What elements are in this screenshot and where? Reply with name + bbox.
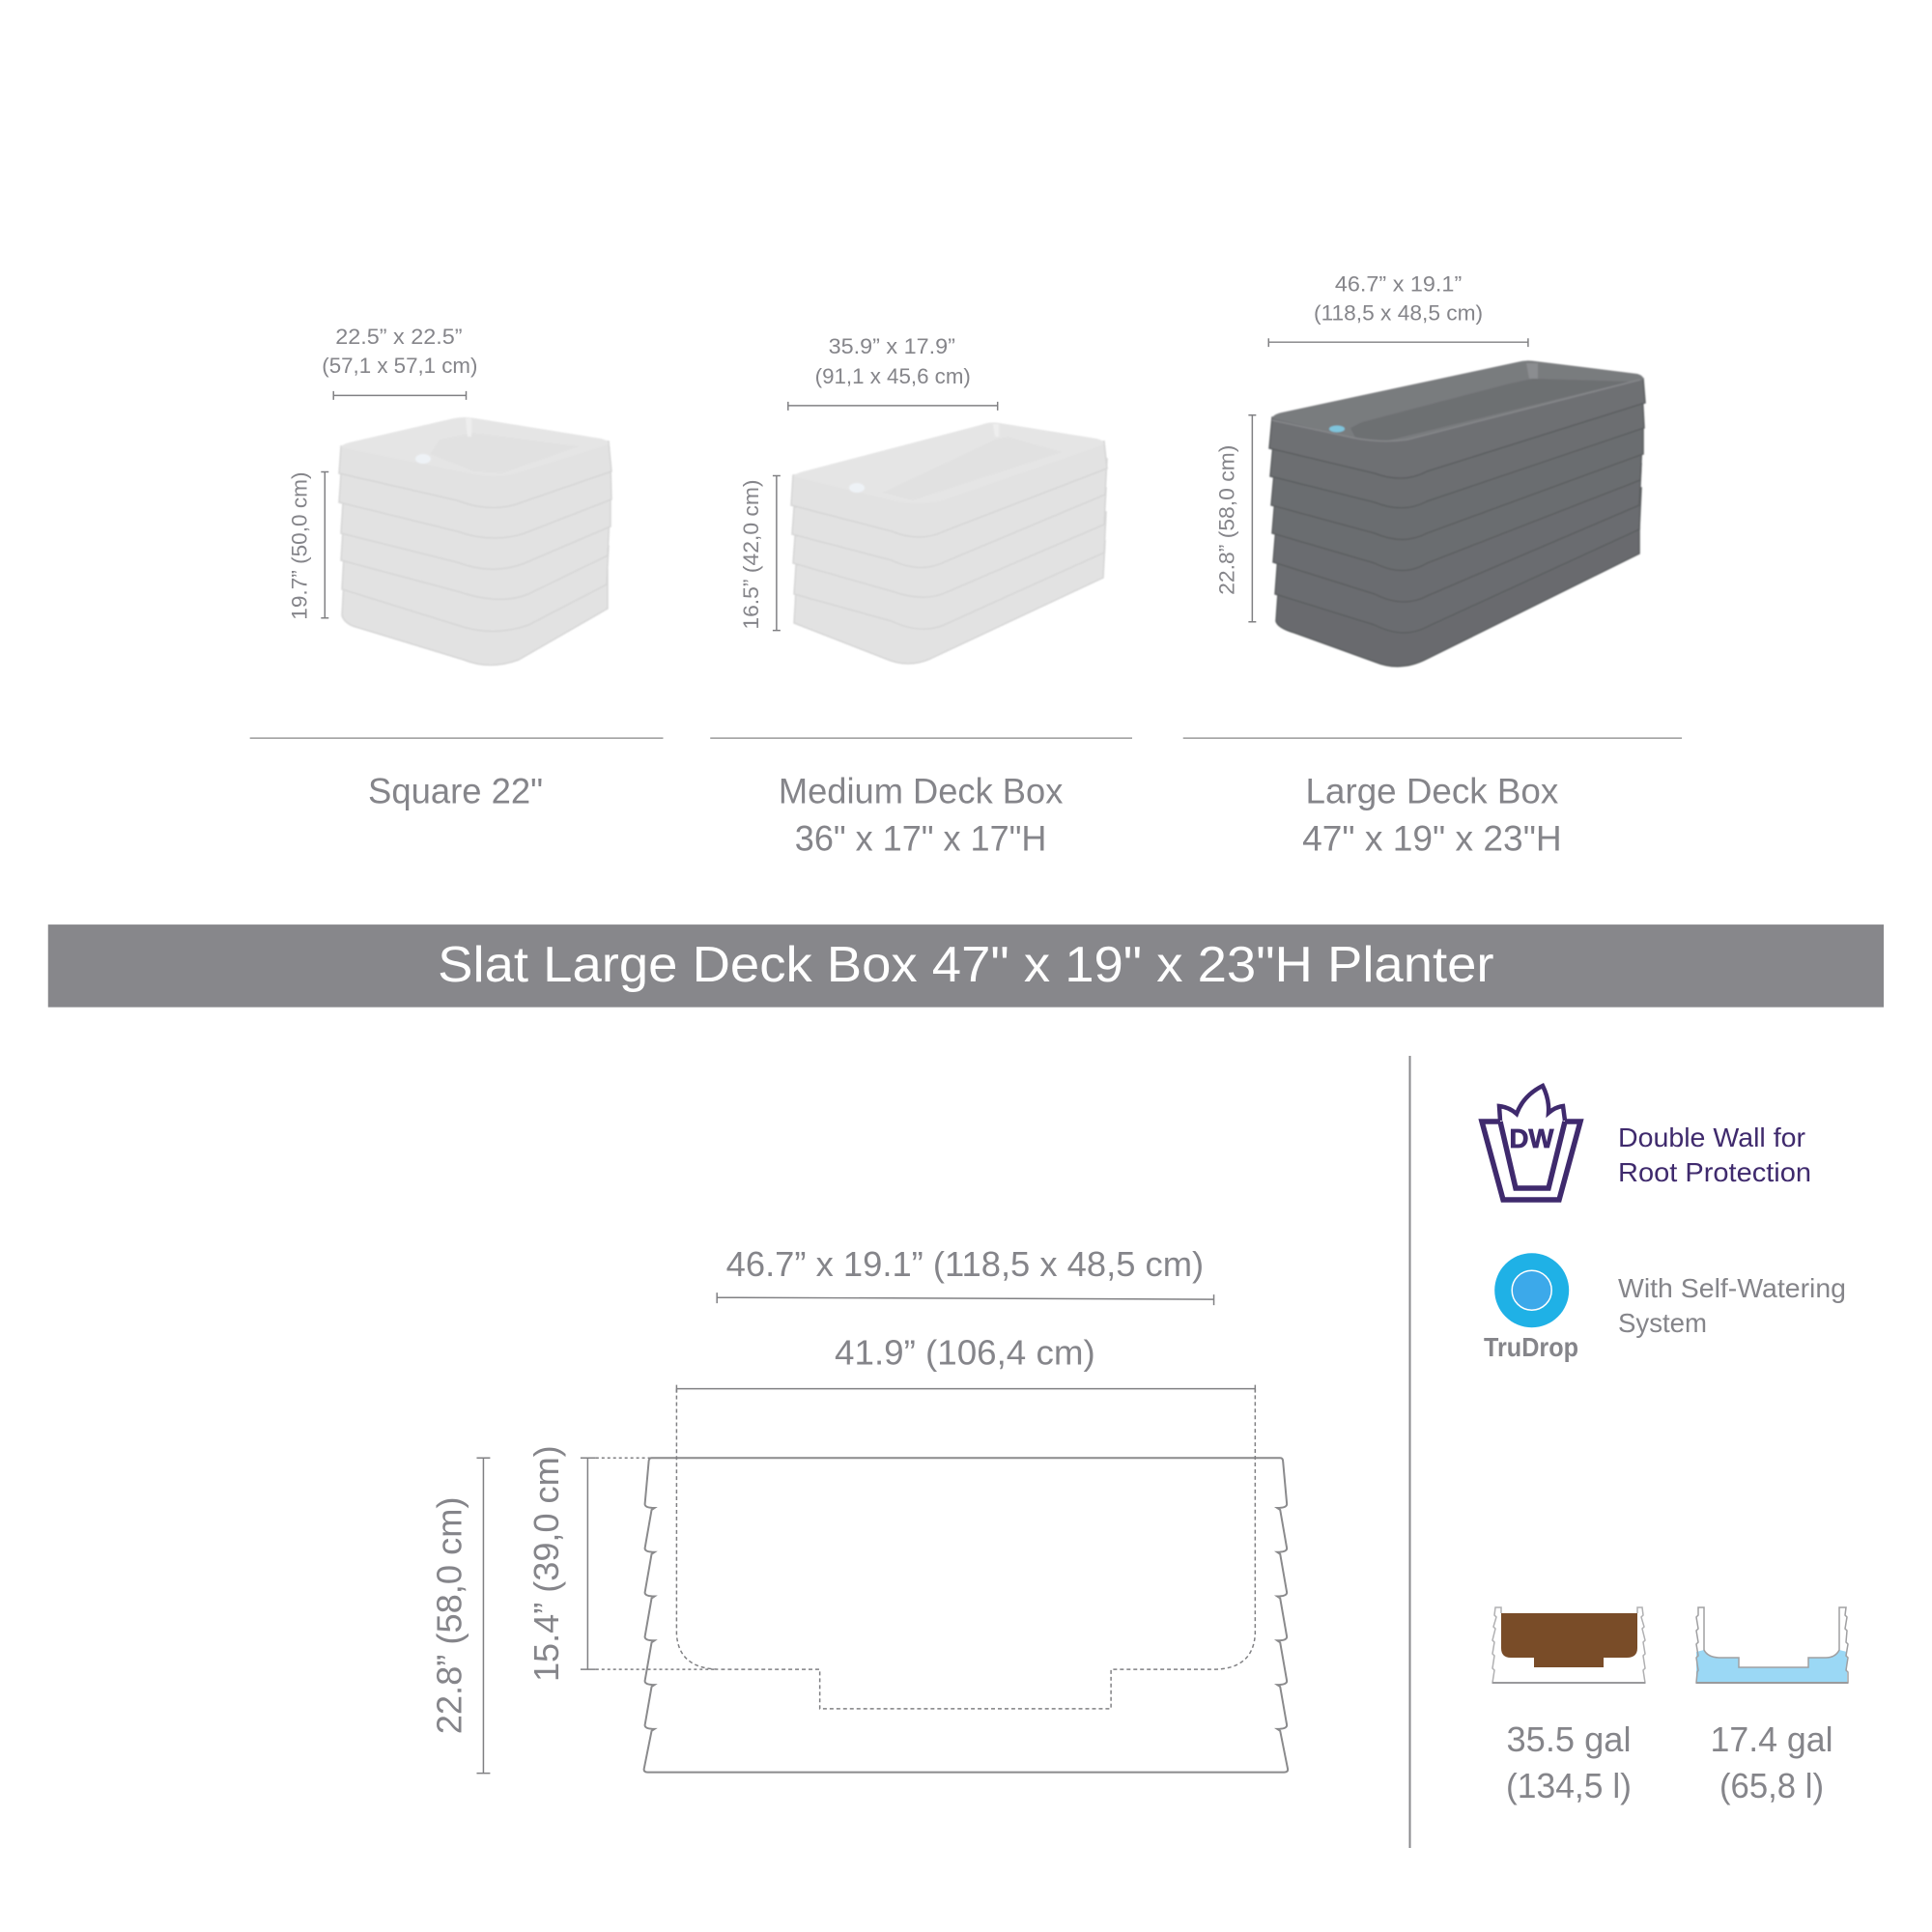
divider and caption: medium deck box: Medium Deck Box [779,772,1063,811]
divider and caption: large deck box: Large Deck Box [1306,772,1558,811]
label: inner width dimension [676,1334,1255,1393]
label: total height dimension: 22.8” (58,0 cm) [431,1497,469,1734]
icon: soil volume section [1492,1607,1645,1683]
label: inner width dimension: 41.9” (106,4 cm) [835,1334,1095,1373]
text: self-watering: System [1618,1308,1707,1338]
outline: planter outer profile [644,1458,1288,1773]
planter: medium deck box light render [791,422,1107,664]
label: outer top dimension [717,1245,1214,1305]
divider and caption: large deck box [1183,738,1682,858]
label: water volume: 17.4 gal [1710,1719,1833,1759]
dimension: medium height [739,475,781,631]
text: self-watering [1618,1273,1846,1338]
panel: medium deck box [710,334,1132,858]
dimension: large top width: (118,5 x 48,5 cm) [1314,300,1483,325]
dimension: large top width [1268,271,1528,347]
divider and caption: square 22: Square 22" [368,772,543,811]
title banner: Slat Large Deck Box 47" x 19" x 23"H Planter [438,936,1494,992]
outline: inner dashed volume [676,1389,1255,1709]
label: soil volume [1506,1719,1632,1805]
divider and caption: medium deck box: 36" x 17" x 17"H [795,818,1046,858]
dimension: large top width: 46.7” x 19.1” [1335,271,1462,296]
panel: soil capacity [1492,1607,1848,1805]
label: soil volume: 35.5 gal [1507,1719,1631,1759]
dimension: large height: 22.8” (58,0 cm) [1214,445,1238,595]
icon: TruDrop: TruDrop [1484,1332,1578,1362]
label: soil volume: (134,5 l) [1506,1766,1632,1805]
dimension: medium height: 16.5” (42,0 cm) [739,479,763,630]
dimension: square height [287,471,328,620]
label: water volume [1710,1719,1833,1805]
planter: square 22 light render [339,417,611,665]
panel: large deck box [1183,271,1682,858]
dimension: square height: 19.7” (50,0 cm) [287,471,311,620]
divider and caption: large deck box: 47" x 19" x 23"H [1302,818,1562,858]
icon: double wall planter: DW [1509,1123,1554,1153]
panel: self-watering feature [1484,1253,1846,1362]
label: water volume: (65,8 l) [1719,1766,1824,1805]
label: outer top dimension: 46.7” x 19.1” (118,5 x 48,5 cm) [726,1245,1204,1284]
icon: double wall planter [1482,1086,1580,1200]
text: double wall [1618,1122,1811,1187]
dimension: medium top width: (91,1 x 45,6 cm) [815,364,971,388]
panel: double wall feature [1482,1086,1811,1200]
divider and caption: medium deck box [710,738,1132,858]
panel: square 22 planter [250,325,663,811]
icon: TruDrop [1484,1253,1578,1362]
dimension: medium top width: 35.9” x 17.9” [829,334,955,358]
label: total height dimension [431,1458,490,1774]
label: inner depth dimension [527,1445,716,1682]
planter: large deck box dark render [1269,360,1645,667]
title banner [48,924,1884,1008]
dimension: square top width [322,325,477,400]
text: self-watering: With Self-Watering [1618,1273,1846,1303]
panel: cross-section diagram [431,1245,1288,1774]
label: inner depth dimension: 15.4” (39,0 cm) [527,1445,566,1682]
text: double wall: Root Protection [1618,1157,1811,1187]
dimension: square top width: 22.5” x 22.5” [335,325,463,349]
dimension: medium top width [788,334,998,411]
dimension: large height [1214,415,1256,622]
text: double wall: Double Wall for [1618,1122,1805,1152]
vertical divider [1408,1056,1410,1848]
icon: water reservoir section [1696,1607,1848,1683]
dimension: square top width: (57,1 x 57,1 cm) [322,354,477,378]
